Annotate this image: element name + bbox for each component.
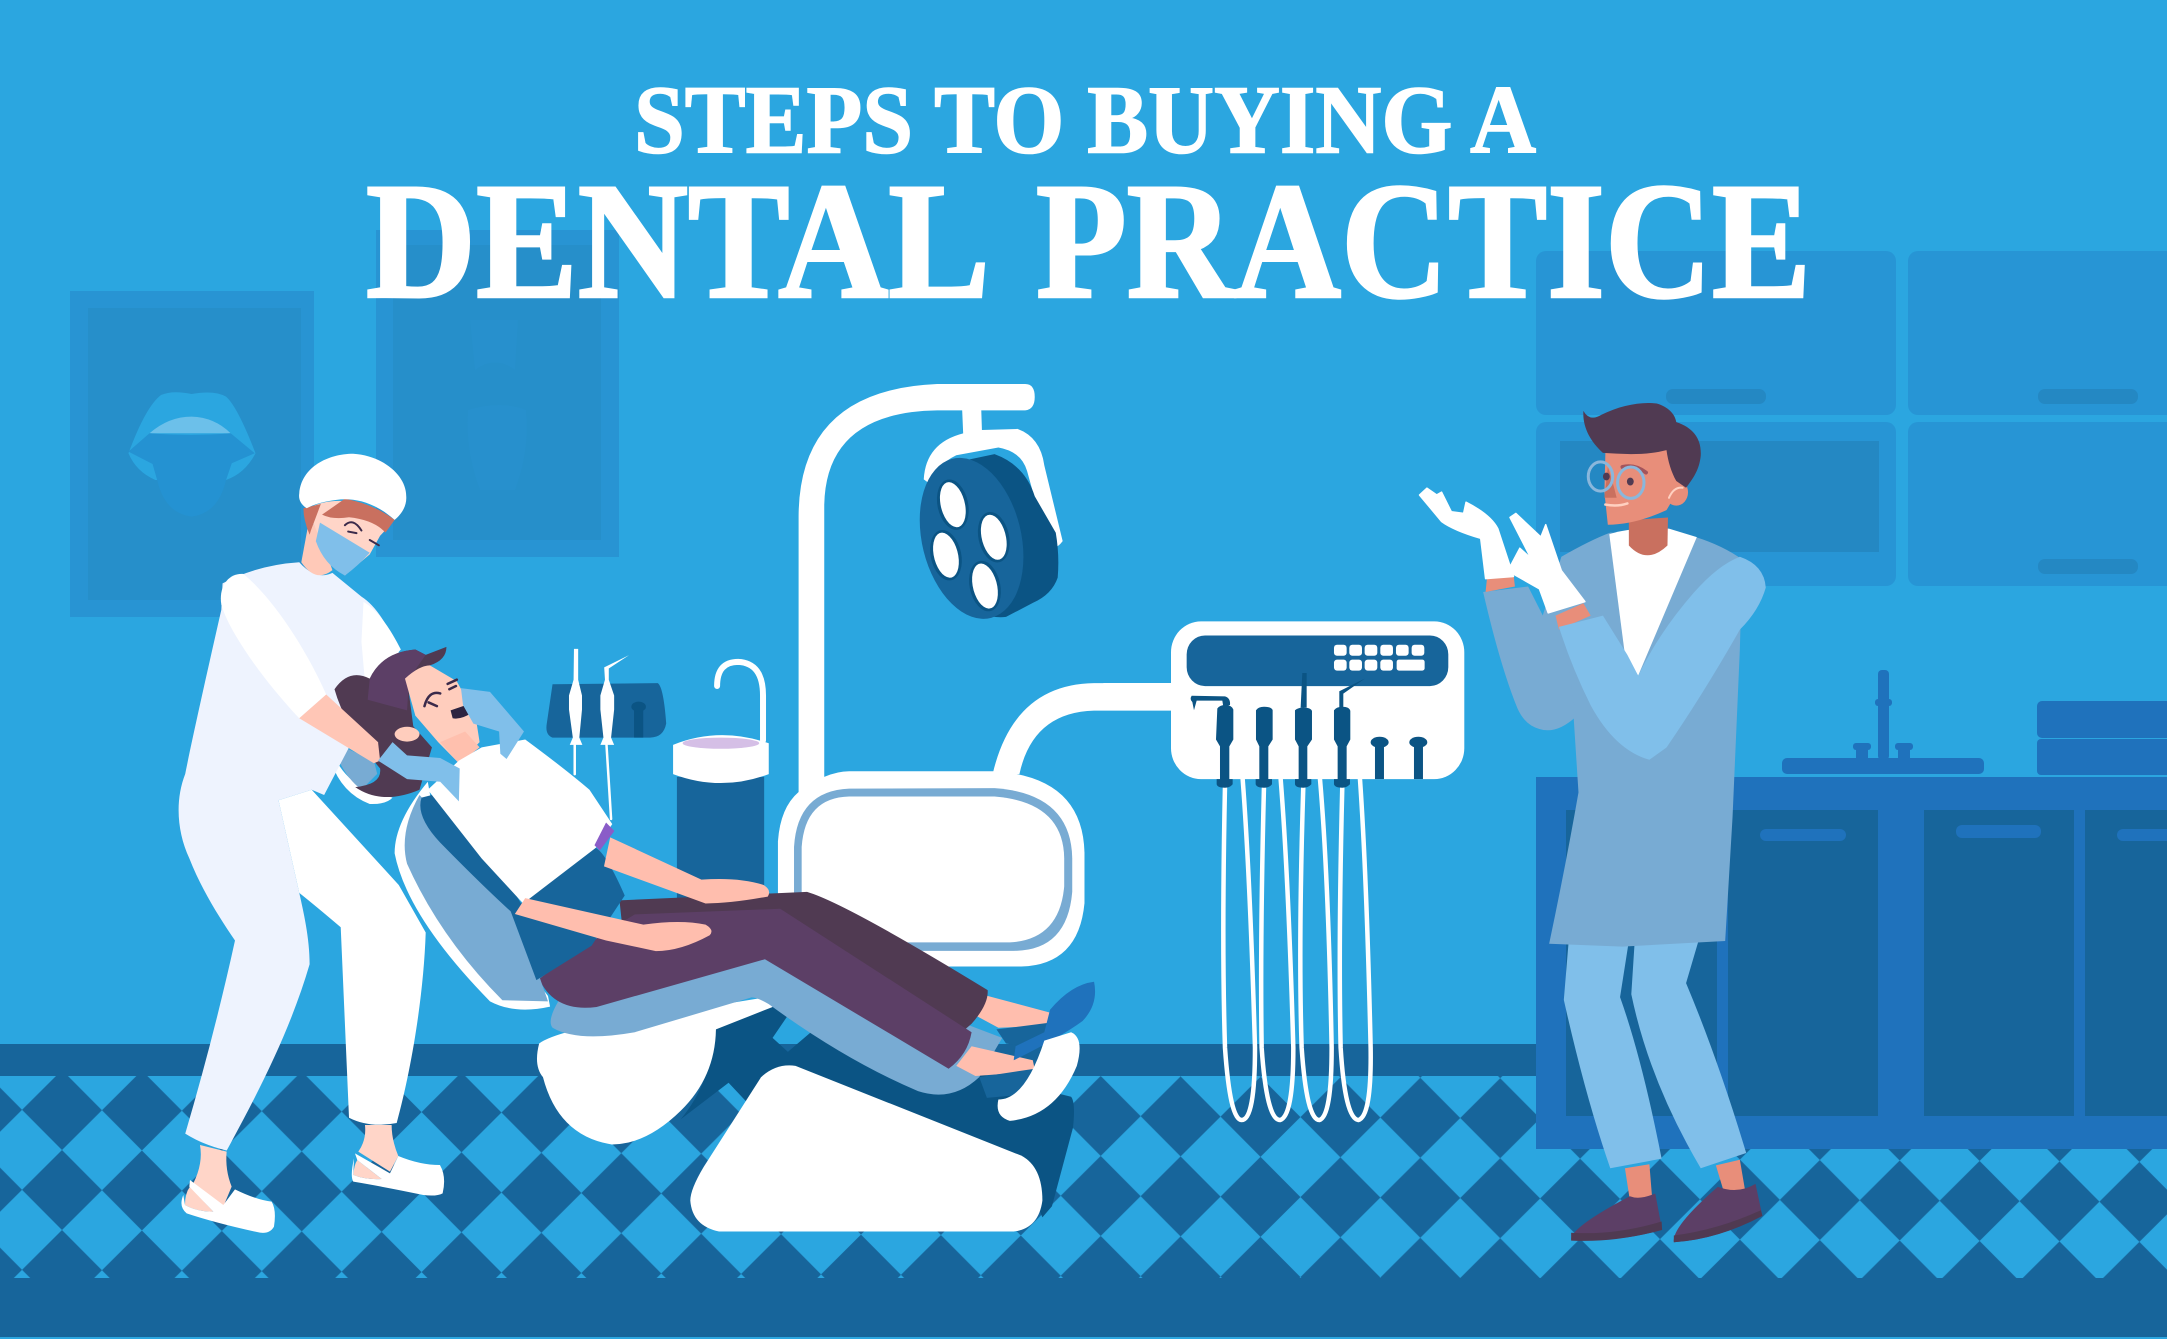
patient white bib — [428, 739, 612, 903]
patient far leg — [620, 892, 988, 1043]
framed tooth x-ray poster — [376, 230, 619, 557]
doctor shirt — [1609, 528, 1697, 676]
hose loops — [1223, 779, 1371, 1120]
patient lower arm — [515, 898, 711, 951]
doctor neck — [1629, 517, 1668, 555]
doctor legs — [1564, 938, 1746, 1168]
chair seat — [537, 997, 773, 1144]
icon: mouth and tongue — [128, 392, 256, 517]
tray body — [1171, 621, 1464, 779]
doctor hair — [1583, 403, 1701, 488]
patient chair back — [395, 782, 550, 1010]
spittoon column — [677, 777, 764, 906]
nurse near sleeve — [221, 574, 326, 718]
patient hair highlight — [368, 650, 426, 710]
icon: faint tooth — [468, 320, 527, 490]
chair headrest — [326, 739, 393, 804]
baseboard stripe — [0, 1044, 2167, 1076]
patient hair — [334, 647, 446, 797]
right ankle and clog — [352, 1125, 444, 1196]
nurse hat — [299, 454, 406, 520]
doctor far sleeve — [1483, 586, 1576, 730]
spittoon faucet — [717, 662, 763, 740]
chair base shadow — [681, 1001, 1074, 1217]
doctor ankles — [1625, 1160, 1745, 1200]
floor bottom band — [0, 1278, 2167, 1337]
checkered floor — [0, 1076, 2167, 1278]
patient shoes — [979, 982, 1095, 1098]
seat cushion — [551, 948, 1002, 1095]
title line two — [366, 149, 1811, 333]
patient dark torso — [420, 790, 625, 980]
nurse forearm — [299, 694, 380, 763]
overhead lamp arm — [799, 384, 1035, 802]
nurse clogs and ankles — [181, 1125, 444, 1233]
nurse eyes — [345, 522, 379, 545]
nurse and patient upper body — [179, 454, 769, 1150]
nurse body and left leg — [179, 562, 399, 1150]
doctor glasses — [1588, 462, 1644, 498]
counter sink and box — [1782, 670, 2167, 775]
nurse face — [307, 501, 395, 575]
doctor forearm skin — [1486, 574, 1591, 630]
dental tool tray with hoses — [1103, 621, 1464, 1120]
upper wall cabinets — [1536, 251, 2167, 586]
tray display — [1187, 635, 1448, 686]
doctor near sleeve — [1559, 557, 1766, 760]
spittoon basin — [673, 735, 769, 783]
doctor lab coat — [1542, 533, 1742, 947]
framed mouth poster — [70, 291, 314, 617]
wall tool holder — [546, 649, 666, 819]
dental chair and patient legs — [537, 384, 1178, 1231]
patient upper arm — [604, 837, 769, 903]
lamp neck and yoke — [924, 406, 1063, 548]
title — [366, 67, 1811, 333]
tray keypad — [1334, 645, 1425, 671]
nurse gloves — [378, 688, 524, 801]
patient purple sleeve trim — [594, 823, 614, 851]
nurse surgical mask — [316, 523, 370, 575]
word: practice: PRACTICE — [1036, 149, 1811, 333]
title line one: STEPS TO BUYING A — [634, 67, 1536, 174]
chair pedestal — [690, 1065, 1042, 1231]
lower counter and doors — [1536, 777, 2167, 1149]
lamp head — [898, 428, 1058, 649]
patient near leg — [539, 909, 972, 1069]
doctor shoes — [1571, 1184, 1762, 1242]
chair footrest — [998, 1032, 1080, 1121]
nurse hair — [303, 499, 395, 535]
nurse right leg — [279, 790, 426, 1125]
chair back panel — [778, 771, 1084, 967]
nurse neck — [301, 517, 332, 575]
left ankle and clog — [181, 1145, 275, 1233]
doctor standing at right — [1420, 403, 1766, 1242]
doctor white gloves — [1420, 488, 1585, 613]
tray connecting arm — [1103, 683, 1173, 710]
second arm to tray — [993, 683, 1178, 774]
nurse far sleeve — [361, 602, 401, 689]
patient face — [395, 665, 480, 763]
doctor head — [1603, 447, 1688, 525]
dental handpieces — [1191, 673, 1427, 788]
patient ankles — [956, 996, 1053, 1076]
word: dental: DENTAL — [366, 149, 990, 333]
